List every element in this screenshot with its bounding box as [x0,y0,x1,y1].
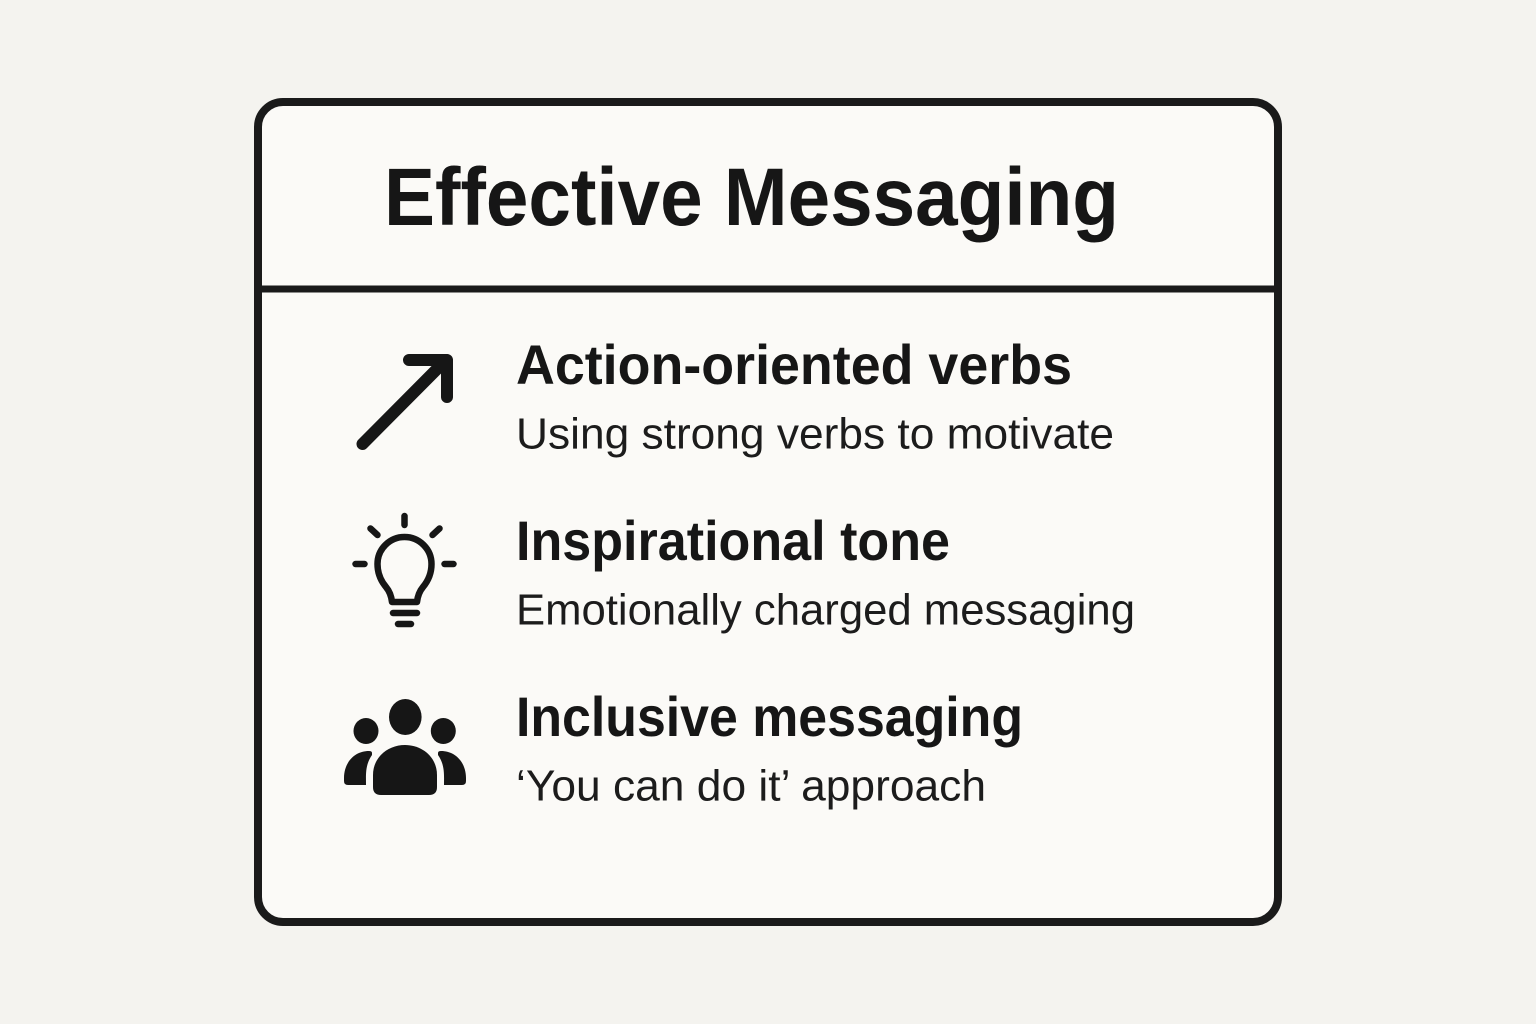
panel: effective messaging card [258,102,1278,922]
item: action-oriented verbs [362,333,1114,458]
item: inspirational tone [356,509,1135,634]
icon: light bulb [356,516,454,624]
text: action description: Using strong verbs to motivate [516,410,1114,458]
heading: inspirational tone: Inspirational tone [516,509,950,572]
text: inspirational description: Emotionally charged messaging [516,586,1135,634]
heading: action-oriented verbs: Action-oriented verbs [516,333,1072,396]
title: Effective Messaging [384,152,1119,243]
icon: arrow [362,360,447,444]
heading: inclusive messaging: Inclusive messaging [516,685,1023,748]
item: inclusive messaging [344,685,1023,810]
icon: group of people [344,699,466,795]
text: inclusive description: ‘You can do it’ approach [516,762,986,810]
